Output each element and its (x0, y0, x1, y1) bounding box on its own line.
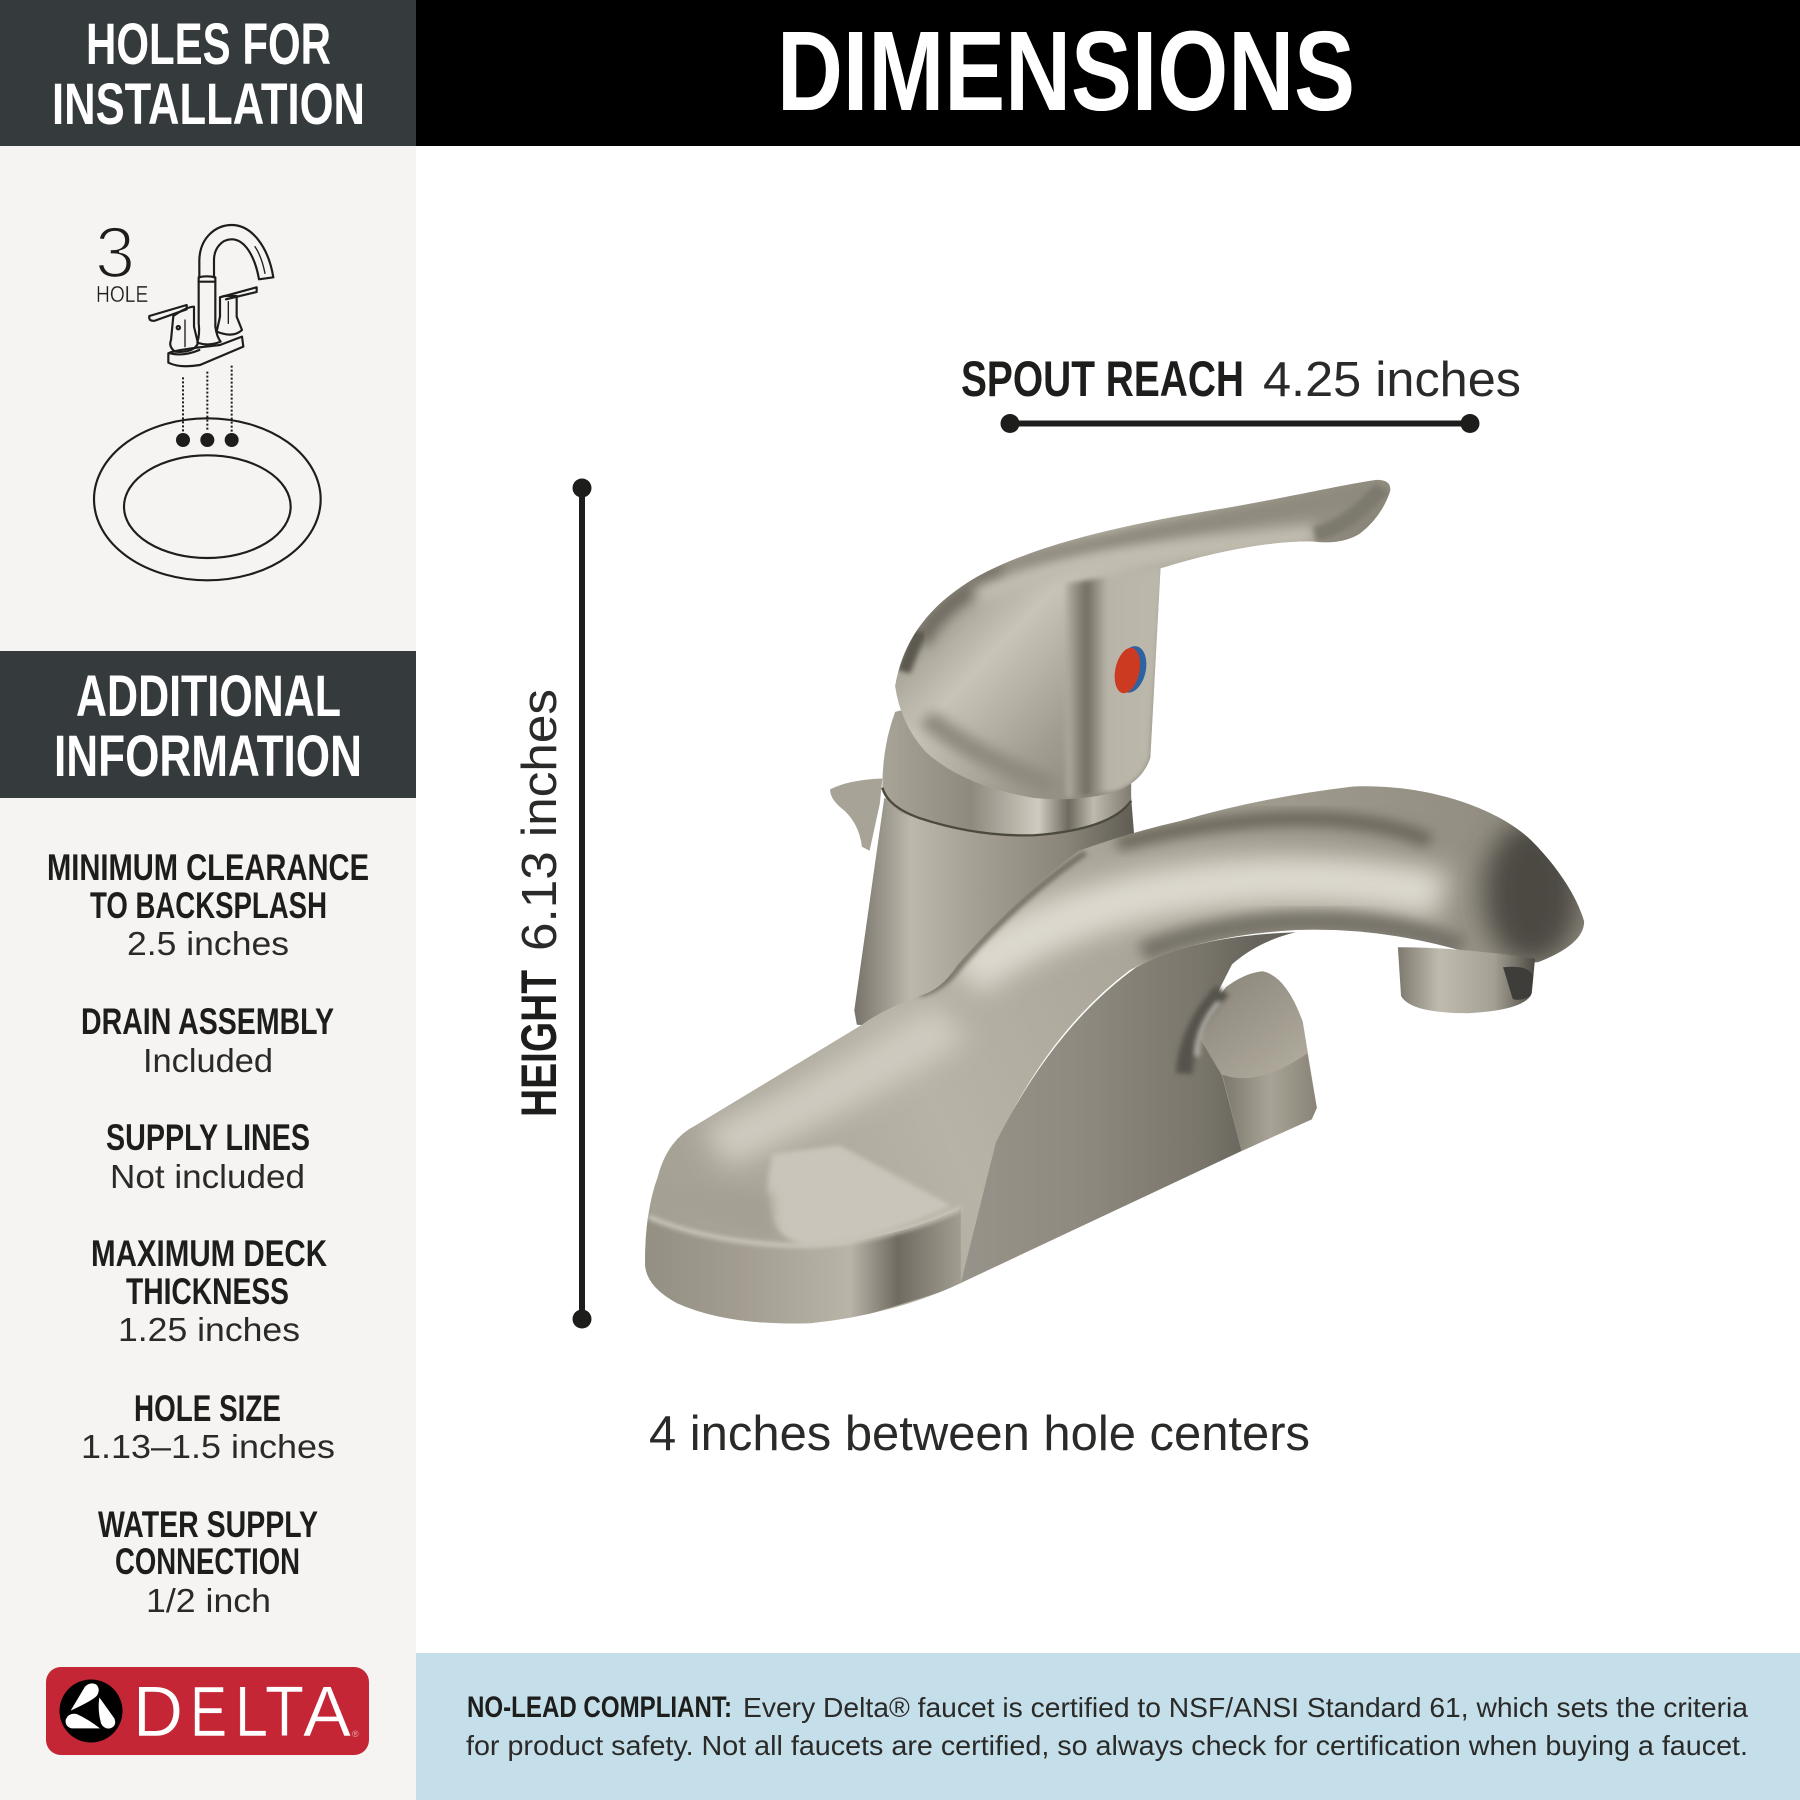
arch underside (961, 932, 1296, 1283)
no-lead compliance banner (416, 1653, 1800, 1800)
heading: additional information: ADDITIONAL (76, 664, 341, 729)
sink (94, 418, 321, 580)
sink holes (176, 433, 239, 447)
faucet photo illustration (639, 480, 1584, 1332)
aerator (1398, 947, 1535, 1013)
logo: Delta: T (265, 1673, 304, 1752)
spec: minimum clearance: 2.5 inches (127, 925, 289, 962)
spec: maximum deck thickness (91, 1233, 327, 1348)
spec: minimum clearance: MINIMUM CLEARANCE (47, 847, 369, 888)
spec: minimum clearance: TO BACKSPLASH (90, 885, 327, 926)
logo: Delta (46, 1667, 369, 1755)
spout reach label (961, 351, 1521, 407)
no-lead compliance banner: for product safety. Not all faucets are certified, so always check for certification when buying a faucet. (466, 1730, 1748, 1761)
heading: holes for installation: INSTALLATION (52, 72, 365, 137)
logo: Delta: L (235, 1673, 268, 1752)
heading: additional information (0, 651, 416, 798)
spec: water supply connection: 1/2 inch (146, 1582, 271, 1619)
spec: water supply connection (98, 1504, 318, 1619)
spec: supply lines (106, 1117, 310, 1195)
rear foot (1181, 971, 1317, 1151)
column (854, 798, 1136, 1033)
3 hole label: HOLE (96, 281, 148, 307)
heading: holes for installation: HOLES FOR (86, 12, 331, 77)
handle (895, 480, 1390, 799)
no-lead compliance banner: NO-LEAD COMPLIANT: (467, 1691, 732, 1724)
spec: hole size: HOLE SIZE (134, 1388, 281, 1429)
title banner: DIMENSIONS (777, 8, 1355, 134)
faucet line drawing (149, 225, 273, 366)
no-lead compliance banner: Every Delta® faucet is certified to NSF/ANSI Standard 61, which sets the criteria (743, 1692, 1748, 1723)
spec: supply lines: SUPPLY LINES (106, 1117, 310, 1158)
spec: maximum deck thickness: 1.25 inches (118, 1311, 300, 1348)
logo: Delta: A (303, 1673, 352, 1752)
main spout and base (639, 786, 1584, 1332)
spec: maximum deck thickness: MAXIMUM DECK (91, 1233, 327, 1274)
panel: left sidebar (0, 0, 416, 1800)
heading: holes for installation (0, 0, 416, 146)
height dimension line (572, 478, 592, 1328)
logo: Delta: E (190, 1673, 227, 1752)
3 hole label: 3 (95, 212, 135, 293)
spec: maximum deck thickness: THICKNESS (126, 1271, 289, 1312)
spout reach label: 4.25 inches (1263, 353, 1521, 407)
pop-up knob (830, 778, 882, 851)
spout reach dimension line (1000, 414, 1480, 433)
height label (511, 689, 567, 1117)
spec: water supply connection: CONNECTION (115, 1541, 300, 1582)
spec: supply lines: Not included (110, 1158, 305, 1195)
logo: Delta: ® (352, 1729, 359, 1739)
hole centers note: 4 inches between hole centers (649, 1407, 1310, 1461)
height label: 6.13 inches (513, 689, 567, 951)
height label: HEIGHT (511, 970, 567, 1117)
hot and cold indicator (1111, 644, 1150, 695)
collar (882, 700, 1131, 835)
logo: Delta: D (133, 1673, 183, 1752)
spec: hole size: 1.13–1.5 inches (81, 1428, 335, 1465)
dotted guide lines (183, 366, 232, 432)
3 hole label (95, 212, 148, 307)
spec: drain assembly: Included (143, 1042, 273, 1079)
spec: minimum clearance (47, 847, 369, 962)
heading: additional information: INFORMATION (54, 724, 362, 789)
spec: drain assembly: DRAIN ASSEMBLY (81, 1001, 334, 1042)
spec: drain assembly (81, 1001, 334, 1079)
spout reach label: SPOUT REACH (961, 351, 1244, 407)
icon: 3 hole faucet and sink diagram (94, 212, 321, 580)
title banner (416, 0, 1800, 146)
spec: hole size (81, 1388, 335, 1465)
spec: water supply connection: WATER SUPPLY (98, 1504, 318, 1545)
